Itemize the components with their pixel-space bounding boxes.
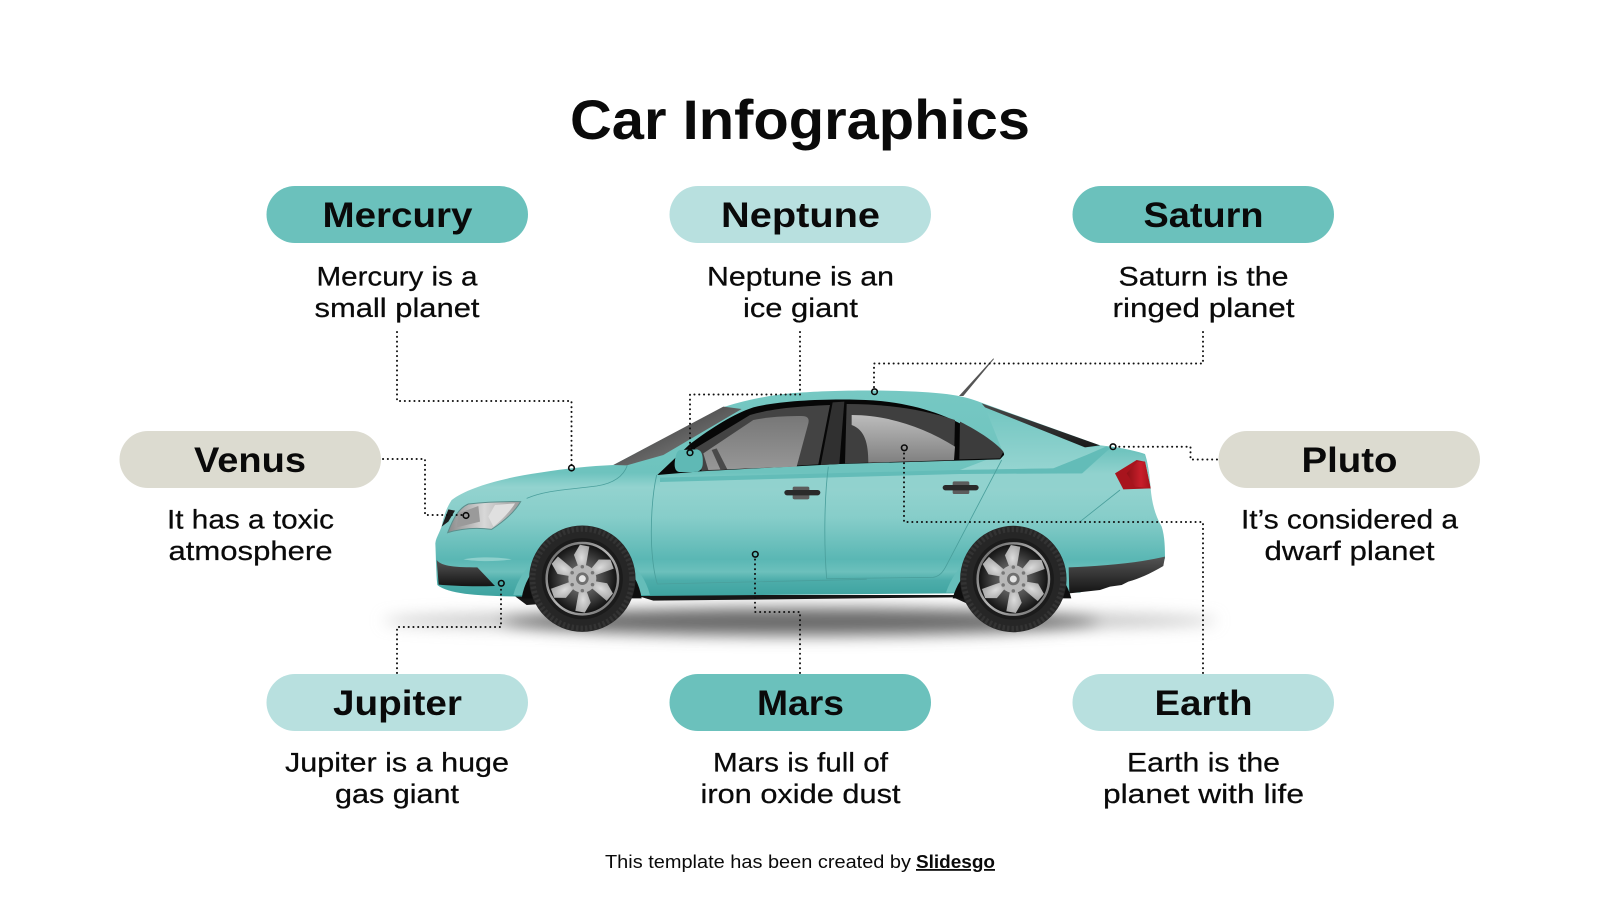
panel: Mercury: Mercury is a (316, 262, 479, 292)
connector: Mars (752, 552, 800, 673)
antenna (959, 358, 994, 396)
connector: Earth (902, 445, 1203, 673)
door panel light strip below waist band (660, 473, 1151, 488)
connector: Jupiter (397, 580, 504, 673)
panel: Earth (1072, 674, 1334, 809)
title: Car Infographics (570, 88, 1030, 151)
door lines (651, 475, 867, 584)
panel: Saturn: Saturn is the (1118, 262, 1288, 292)
front wheel (529, 525, 636, 632)
panel: Mars (670, 674, 931, 809)
seat belt (712, 448, 727, 470)
rear glass (845, 404, 955, 463)
front grille sliver (442, 509, 455, 527)
rear quarter panel highlight (960, 407, 1107, 470)
connector: Pluto (1110, 444, 1217, 460)
underbody (513, 595, 1070, 605)
panel: Venus: atmosphere (168, 536, 332, 566)
front bumper highlight (463, 557, 512, 561)
taillight (1115, 460, 1151, 489)
connector: Mercury (397, 332, 574, 471)
b pillar (821, 402, 844, 465)
panel: Pluto: dwarf planet (1264, 536, 1435, 566)
mirror (675, 449, 703, 472)
quarter glass (959, 422, 1003, 459)
panel: Neptune: ice giant (743, 293, 859, 323)
headlight (448, 502, 521, 533)
rear bumper (1069, 557, 1165, 593)
panel: Venus: Venus (194, 441, 306, 480)
panel: Pluto: Pluto (1302, 441, 1398, 480)
panel: Earth: planet with life (1103, 779, 1304, 809)
car body (435, 390, 1165, 597)
front glass outer (695, 405, 830, 471)
panel: Earth: Earth (1154, 684, 1252, 723)
hood line (527, 465, 627, 498)
door handles (784, 481, 979, 499)
panel: Mercury: small planet (314, 293, 480, 323)
panel: Jupiter: Jupiter (333, 684, 462, 723)
panel: Earth: Earth is the (1127, 748, 1280, 778)
window frames (657, 400, 1004, 475)
panel: Mercury (266, 186, 528, 323)
footer credit: This template has been created by (605, 852, 911, 872)
panel: Saturn (1072, 186, 1334, 323)
footer credit: Slidesgo (916, 852, 995, 872)
rear wheel (960, 526, 1067, 632)
car illustration (383, 358, 1217, 636)
panel: Mars: Mars is full of (713, 748, 889, 778)
connector: Neptune (687, 332, 800, 456)
panel: Mars: iron oxide dust (700, 779, 901, 809)
wheel arches (522, 547, 642, 598)
panel: Mars: Mars (757, 684, 844, 723)
panel: Neptune: Neptune is an (707, 262, 894, 292)
panel: Jupiter: gas giant (335, 779, 460, 809)
panel: Mercury: Mercury (322, 196, 473, 235)
front glass light (703, 416, 809, 470)
connector: Venus (383, 459, 469, 518)
panel: Pluto: It’s considered a (1241, 504, 1459, 534)
panel: Jupiter (266, 674, 528, 809)
panel: Saturn: Saturn (1144, 196, 1264, 235)
panel: Pluto (1218, 431, 1480, 566)
ground shadow (383, 608, 1217, 636)
windscreen (613, 407, 742, 465)
panel: Neptune: Neptune (721, 196, 880, 235)
fender arch highlights (513, 542, 650, 595)
panel: Saturn: ringed planet (1112, 293, 1295, 323)
waist band (660, 447, 1110, 482)
panel: Neptune (670, 186, 931, 323)
panel: Jupiter: Jupiter is a huge (285, 748, 509, 778)
front bumper intake (437, 560, 495, 586)
right of rear band (1082, 448, 1149, 474)
panel: Venus: It has a toxic (167, 504, 334, 534)
panel: Venus (120, 431, 381, 566)
rear window (982, 403, 1100, 447)
connector: Saturn (872, 332, 1203, 395)
